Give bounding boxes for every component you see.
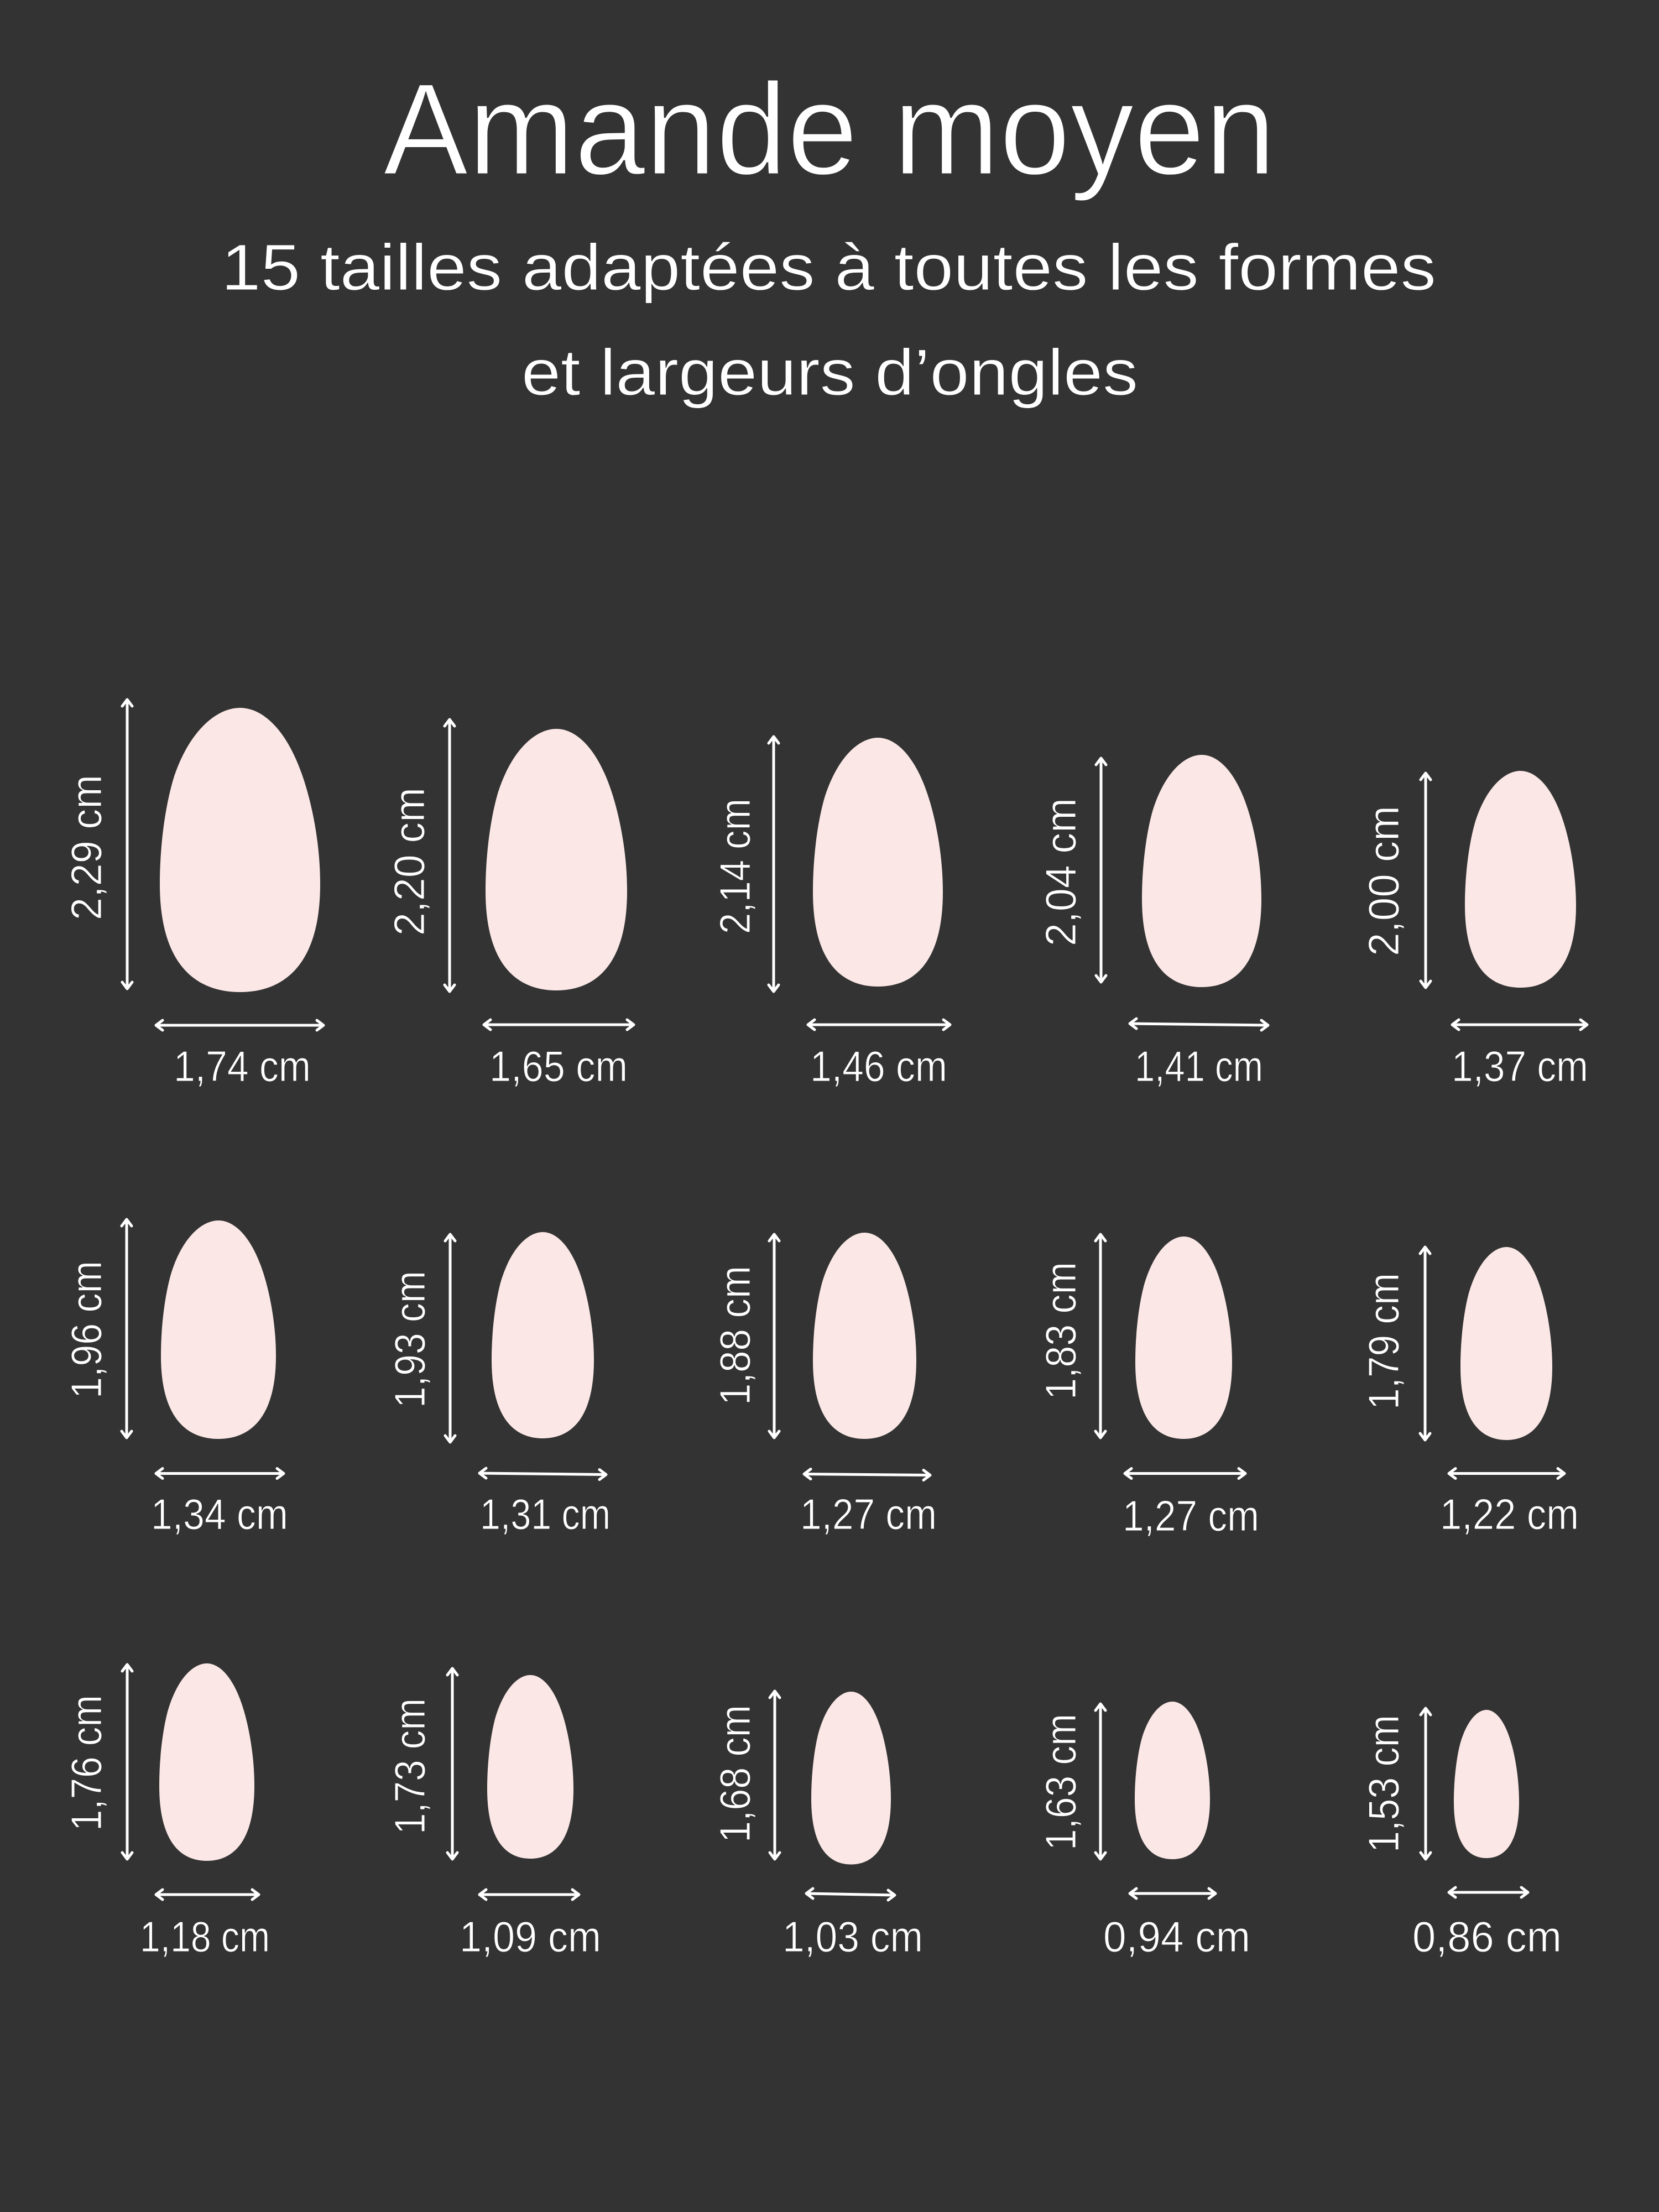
nail size 6 xyxy=(62,1219,288,1538)
width label: 0,86 cm xyxy=(1412,1912,1562,1961)
width arrow xyxy=(1130,1888,1215,1898)
width label: 1,46 cm xyxy=(810,1042,947,1091)
height label: 2,20 cm xyxy=(385,787,434,936)
height label: 2,04 cm xyxy=(1036,798,1085,946)
width label: 1,27 cm xyxy=(800,1490,937,1538)
nail shape xyxy=(161,1220,276,1439)
nail size 2 xyxy=(385,719,634,1091)
width arrow xyxy=(156,1890,259,1900)
height label: 1,83 cm xyxy=(1036,1262,1085,1400)
height arrow xyxy=(1421,773,1431,988)
width arrow xyxy=(804,1469,930,1480)
height arrow xyxy=(447,1668,457,1859)
width arrow xyxy=(1125,1469,1245,1479)
height arrow xyxy=(769,737,779,992)
height label: 1,76 cm xyxy=(62,1695,111,1831)
nail size 12 xyxy=(385,1668,601,1961)
nail shape xyxy=(1465,771,1576,988)
height arrow xyxy=(1096,758,1106,982)
nail shape xyxy=(487,1675,573,1859)
nail size 13 xyxy=(711,1691,923,1961)
width label: 1,31 cm xyxy=(480,1490,611,1538)
nail size 15 xyxy=(1359,1708,1562,1961)
width arrow xyxy=(1449,1887,1528,1897)
nail shape xyxy=(160,708,320,992)
nail shape xyxy=(486,729,627,990)
nail size 7 xyxy=(385,1232,611,1538)
height label: 2,14 cm xyxy=(711,799,759,934)
width arrow xyxy=(1449,1469,1564,1479)
height arrow xyxy=(1095,1234,1105,1438)
nail size 14 xyxy=(1036,1702,1250,1961)
width label: 1,41 cm xyxy=(1135,1042,1263,1091)
height label: 1,73 cm xyxy=(385,1698,434,1834)
width label: 1,37 cm xyxy=(1452,1042,1588,1091)
nail size 5 xyxy=(1359,771,1588,1091)
width arrow xyxy=(479,1468,606,1480)
nail size 11 xyxy=(62,1663,270,1961)
height arrow xyxy=(445,719,455,992)
nail shape xyxy=(1135,1702,1210,1859)
height arrow xyxy=(122,1665,132,1859)
width label: 1,09 cm xyxy=(460,1912,601,1961)
height label: 1,93 cm xyxy=(385,1271,434,1408)
width label: 1,65 cm xyxy=(489,1042,628,1091)
width arrow xyxy=(806,1888,895,1900)
width arrow xyxy=(1452,1020,1587,1030)
nail shape xyxy=(1460,1247,1552,1440)
width label: 1,27 cm xyxy=(1123,1491,1259,1540)
height arrow xyxy=(122,1219,132,1438)
height arrow xyxy=(770,1691,780,1859)
nail shape xyxy=(811,1692,891,1865)
height arrow xyxy=(1095,1704,1105,1859)
height label: 2,29 cm xyxy=(62,775,111,920)
width label: 1,22 cm xyxy=(1440,1490,1579,1538)
height arrow xyxy=(1420,1247,1430,1440)
nail shape xyxy=(159,1663,254,1861)
title: Amande moyen xyxy=(383,56,1276,202)
nail size 9 xyxy=(1036,1234,1259,1540)
nail shape xyxy=(1142,755,1261,987)
height arrow xyxy=(769,1234,779,1438)
nail shape xyxy=(813,738,943,987)
nail shape xyxy=(1454,1710,1519,1858)
width arrow xyxy=(156,1020,324,1030)
width arrow xyxy=(1130,1019,1268,1030)
width arrow xyxy=(156,1469,284,1479)
subtitle line 2: et largeurs d’ongles xyxy=(521,336,1138,409)
width label: 0,94 cm xyxy=(1103,1912,1250,1961)
width label: 1,03 cm xyxy=(782,1912,923,1961)
height arrow xyxy=(122,700,132,989)
width label: 1,34 cm xyxy=(151,1490,288,1538)
nail shape xyxy=(492,1232,594,1438)
height label: 1,63 cm xyxy=(1036,1714,1085,1850)
height label: 1,88 cm xyxy=(711,1266,759,1405)
nail size 4 xyxy=(1036,755,1268,1091)
width label: 1,18 cm xyxy=(140,1912,270,1961)
nail size 1 xyxy=(62,700,324,1091)
width arrow xyxy=(808,1020,950,1030)
height arrow xyxy=(1421,1708,1431,1859)
subtitle line 1: 15 tailles adaptées à toutes les formes xyxy=(221,231,1436,304)
height arrow xyxy=(445,1234,455,1442)
nail shape xyxy=(813,1233,916,1439)
nail shape xyxy=(1135,1237,1232,1439)
height label: 1,68 cm xyxy=(711,1705,759,1843)
nail size 8 xyxy=(711,1233,937,1538)
height label: 1,53 cm xyxy=(1359,1715,1408,1853)
width label: 1,74 cm xyxy=(174,1042,311,1091)
nail size 10 xyxy=(1359,1247,1579,1538)
height label: 2,00 cm xyxy=(1359,806,1408,956)
height label: 1,96 cm xyxy=(62,1261,111,1399)
width arrow xyxy=(484,1020,634,1030)
width arrow xyxy=(479,1890,579,1900)
nail size 3 xyxy=(711,737,950,1091)
height label: 1,79 cm xyxy=(1359,1273,1408,1410)
